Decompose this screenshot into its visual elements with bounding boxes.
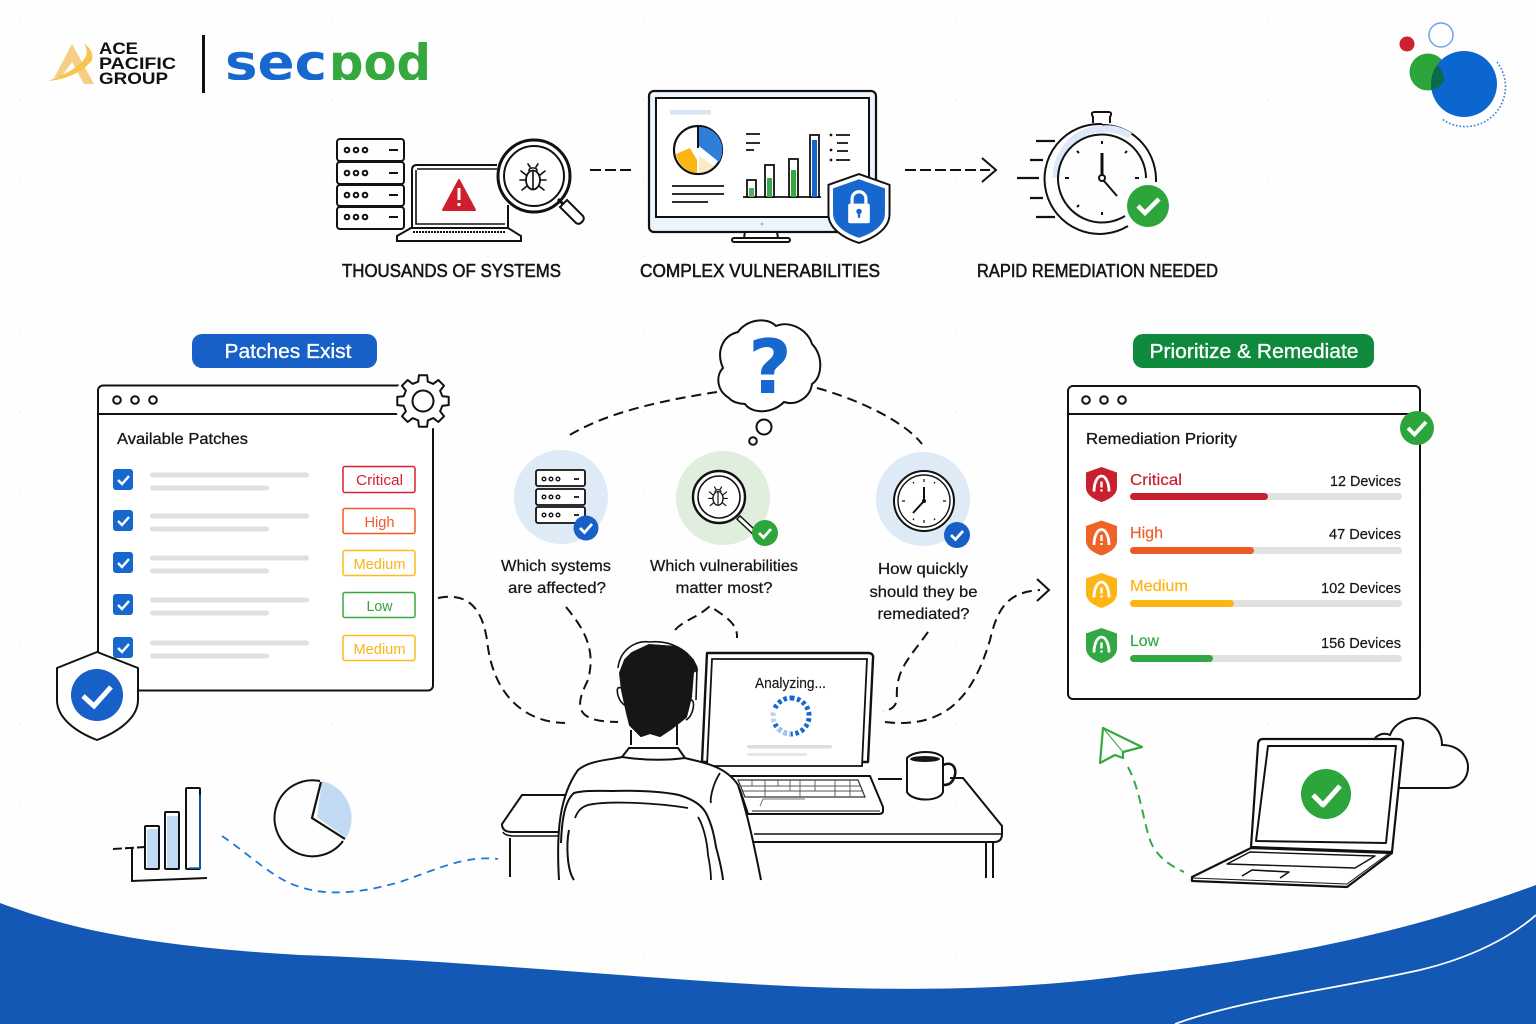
icon: laptop with check (1192, 739, 1403, 887)
row 2 high: High (364, 515, 394, 531)
row high: High (1130, 525, 1163, 542)
question: how quickly: should they be (870, 584, 978, 601)
icon: security shield with lock (828, 174, 890, 243)
row 1 critical (113, 466, 415, 492)
illustration: analyst laptop (702, 653, 883, 814)
illustration: desk (502, 778, 1002, 878)
icon: paper plane (1100, 728, 1142, 763)
pill: prioritize and remediate (1133, 334, 1374, 368)
footer wave (0, 885, 1536, 1024)
check badge (1127, 185, 1169, 227)
row high (1086, 520, 1402, 556)
logo: SecPod: sec (225, 34, 327, 92)
icon: bug magnifier (498, 140, 584, 224)
illustration: analyst from behind (558, 642, 761, 880)
chart: small bars (113, 788, 207, 881)
row 4 low (113, 592, 415, 618)
bar chart (743, 135, 821, 197)
dashed green path (1128, 767, 1184, 872)
row 3 medium (113, 550, 415, 576)
row low (1086, 628, 1402, 663)
row low: Low (1130, 633, 1159, 650)
row medium (1086, 573, 1402, 608)
icon: cloud (1375, 718, 1468, 788)
row 4 low: Low (366, 599, 393, 615)
icon: server stack (337, 139, 404, 229)
dashed connector (590, 169, 632, 171)
logo: SecPod: pod (329, 34, 431, 92)
pill: patches exist (192, 334, 377, 368)
dashed blue path (222, 836, 498, 892)
pill: prioritize and remediate: Prioritize & Remediate (1150, 341, 1358, 363)
logo divider (202, 35, 205, 93)
icon: servers, laptop alert and bug magnifier (337, 139, 584, 241)
logo: Ace Pacific Group: ACE (99, 40, 138, 58)
logo: Ace Pacific Group (48, 40, 176, 88)
row 5 medium: Medium (354, 642, 406, 658)
row 3 medium: Medium (354, 557, 406, 573)
row medium: 102 Devices (1321, 581, 1401, 597)
chair (561, 791, 723, 880)
icon: gear (394, 372, 452, 430)
dashed connectors from thought cloud (565, 388, 922, 444)
row critical: Critical (1130, 472, 1182, 489)
question: which systems: are affected? (508, 580, 606, 597)
screen text: Analyzing... (755, 676, 826, 692)
row high: 47 Devices (1329, 527, 1401, 543)
icon: alert laptop (397, 165, 521, 241)
question: how quickly: remediated? (878, 606, 970, 623)
heading: thousands of systems: THOUSANDS OF SYSTEMS (342, 261, 561, 281)
row critical: 12 Devices (1330, 474, 1401, 490)
panel title: Available Patches (117, 431, 248, 448)
question: how quickly: How quickly (878, 561, 968, 578)
question: which vulnerabilities: matter most? (676, 580, 773, 597)
row 1 critical: Critical (356, 473, 403, 489)
logo: Ace Pacific Group: GROUP (99, 70, 168, 88)
logo: Ace Pacific Group: PACIFIC (99, 55, 176, 73)
arrow: to rapid remediation (905, 158, 996, 182)
pie chart (674, 126, 722, 174)
heading: rapid remediation needed: RAPID REMEDIATION NEEDED (977, 261, 1218, 281)
row critical (1086, 467, 1402, 502)
question: which vulnerabilities: Which vulnerabilities (650, 558, 798, 575)
arrow head into remediation panel (1037, 579, 1049, 601)
icon: thought cloud with question mark (718, 320, 820, 445)
icon: verified shield (57, 652, 138, 740)
panel: available patches (98, 372, 452, 690)
icon: coffee mug (907, 752, 955, 800)
pill: patches exist: Patches Exist (224, 341, 352, 363)
heading: complex vulnerabilities: COMPLEX VULNERABILITIES (640, 261, 880, 281)
panel title: Remediation Priority (1086, 431, 1237, 448)
panel: remediation priority (1068, 386, 1434, 699)
icon: thought cloud with question mark: ? (748, 323, 792, 411)
chart: small pie (275, 780, 352, 856)
logo: SecPod (228, 42, 427, 80)
check badge (1400, 411, 1434, 445)
dashed connectors to analyst (438, 590, 1040, 723)
row 5 medium (113, 636, 415, 660)
question: which systems: Which systems (501, 558, 611, 575)
icon: monitor dashboard with shield (649, 91, 890, 243)
row 2 high (113, 508, 415, 534)
spinner (773, 698, 809, 734)
icon: stopwatch with check (1017, 112, 1169, 234)
question: which systems (501, 450, 611, 597)
question: how quickly (870, 452, 978, 623)
row low: 156 Devices (1321, 636, 1401, 652)
question: which vulnerabilities (650, 451, 798, 597)
decorative circles (1400, 23, 1505, 127)
row medium: Medium (1130, 578, 1188, 595)
